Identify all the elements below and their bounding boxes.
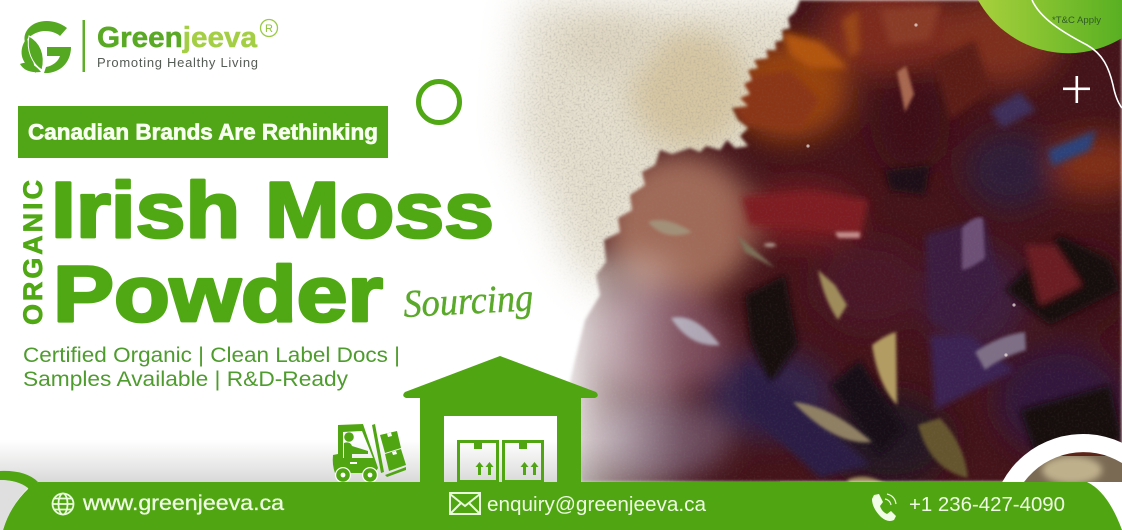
subhead text: Samples Available | R&D-Ready (23, 368, 349, 391)
icon: G with leaf (20, 21, 71, 73)
divider bar (82, 20, 85, 72)
base colour masses (590, 0, 1122, 485)
photo: Irish moss seaweed (540, 0, 1122, 490)
footer bar (0, 471, 1122, 530)
left corner arc (0, 471, 38, 490)
T&C note: *T&C Apply (1052, 15, 1101, 26)
banner: Canadian Brands Are Rethinking: Canadian Brands Are Rethinking (28, 120, 378, 144)
icon: forklift (333, 424, 406, 483)
box right (504, 441, 542, 482)
green ring (418, 82, 460, 122)
registered mark: R (265, 23, 273, 35)
script word: Sourcing: Sourcing (402, 276, 534, 326)
plus sign (1063, 76, 1090, 103)
subhead text: Certified Organic | Clean Label Docs | (23, 344, 400, 367)
logo (20, 20, 278, 73)
subhead text (23, 344, 400, 391)
leaves (735, 5, 1122, 478)
footer: phone (872, 494, 1065, 521)
footer: email: enquiry@greenjeeva.ca (487, 494, 707, 516)
curved white line (1032, 0, 1122, 108)
box left (458, 441, 498, 482)
icon: warehouse (403, 356, 598, 482)
vertical label: ORGANIC: ORGANIC (18, 180, 48, 325)
registered mark (260, 20, 278, 36)
icon: globe (52, 494, 74, 514)
green circle: top right (978, 0, 1122, 108)
tagline: Promoting Healthy Living (97, 55, 258, 70)
speckle (702, 2, 1121, 481)
tan stones and shiny highlights (648, 66, 1026, 490)
heading: Irish Moss: Irish Moss (51, 165, 494, 254)
banner: Canadian Brands Are Rethinking (18, 106, 388, 158)
footer: phone: +1 236-427-4090 (909, 494, 1065, 516)
wordmark: Greenjeeva (97, 22, 258, 54)
heading: Powder: Powder (53, 249, 383, 338)
icon: phone (872, 494, 896, 521)
bright droplets (806, 23, 1016, 357)
background: white page with sand (0, 0, 822, 482)
icon: envelope (450, 493, 480, 514)
footer: website: www.greenjeeva.ca (82, 491, 284, 515)
decorative ring: bottom right (1002, 434, 1122, 484)
